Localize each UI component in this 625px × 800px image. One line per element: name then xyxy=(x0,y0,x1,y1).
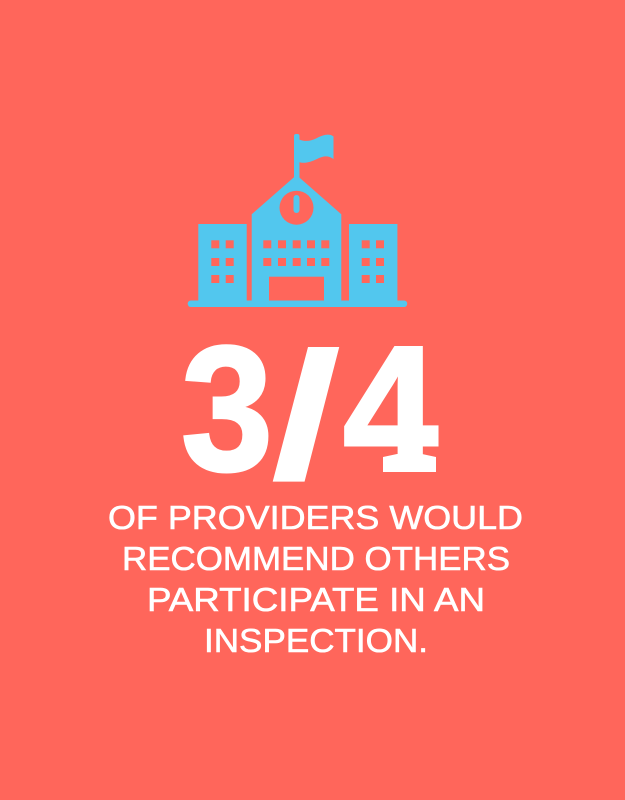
statistic: 3/4: 3 xyxy=(181,309,273,508)
statistic: 3/4: 4 xyxy=(343,309,438,508)
statistic: 3/4 xyxy=(181,309,438,515)
statistic: 3/4: / xyxy=(272,316,340,515)
caption: OF PROVIDERS WOULD xyxy=(108,499,523,536)
caption: PARTICIPATE IN AN xyxy=(147,581,485,618)
caption: RECOMMEND OTHERS xyxy=(122,540,510,577)
caption xyxy=(108,499,523,659)
icon: school building xyxy=(188,134,407,307)
caption: INSPECTION. xyxy=(204,622,428,659)
